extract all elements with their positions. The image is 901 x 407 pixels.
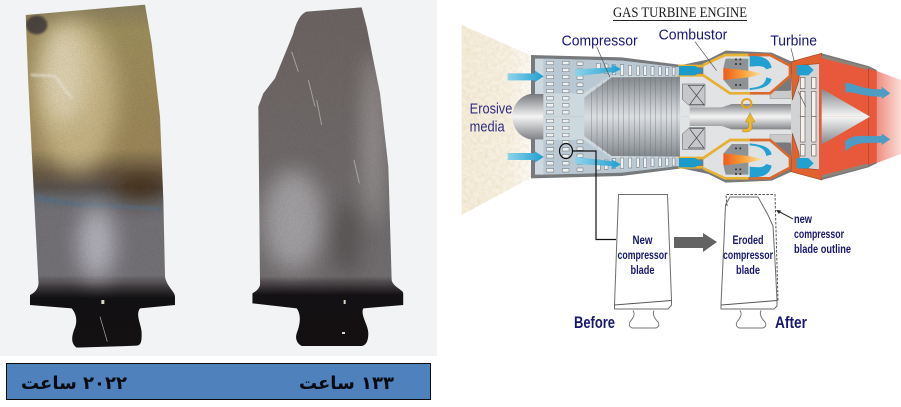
label: Erosive media: Erosive: [470, 102, 512, 118]
photo: blade after 133 hours: [250, 7, 407, 350]
new compressor blade: [614, 194, 672, 328]
label: Combustor: Combustor: [659, 27, 728, 43]
arrow: before to after: [674, 233, 717, 252]
label: new compressor blade outline: [794, 212, 851, 256]
exhaust flow arrows: [845, 83, 890, 99]
label: Eroded compressor blade: Eroded: [732, 233, 764, 247]
label: After: After: [775, 313, 807, 332]
engine labels: [470, 27, 817, 136]
label: new compressor blade outline: new: [794, 212, 813, 226]
blade root: [736, 310, 766, 328]
erosive media spray: [462, 25, 533, 215]
caption: 2022 hours: ۲۰۲۲ ساعت: [21, 373, 127, 394]
pointer: new blade outline: [776, 210, 793, 219]
label: New compressor blade: [618, 233, 668, 277]
photo: blade after 2022 hours: [23, 3, 177, 350]
photo panel: blade photographs: [0, 0, 437, 356]
label: Compressor: Compressor: [562, 33, 638, 49]
label: new compressor blade outline: compressor: [794, 227, 844, 241]
label: Eroded compressor blade: blade: [736, 263, 760, 277]
caption bar: hours of operation: [6, 364, 430, 400]
leader lines to labels: [597, 42, 806, 107]
title: GAS TURBINE ENGINE: [613, 5, 747, 21]
label: Turbine: Turbine: [770, 33, 817, 49]
label: new compressor blade outline: blade outline: [794, 242, 851, 256]
label: New compressor blade: blade: [630, 263, 655, 277]
eroded compressor blade: [721, 194, 778, 328]
label: Eroded compressor blade: compressor: [723, 248, 773, 262]
callout: circle and leader from compressor to blade: [560, 144, 616, 240]
label: New compressor blade: New: [632, 233, 653, 247]
label: Before: Before: [574, 313, 615, 332]
label: Erosive media: media: [470, 120, 505, 136]
engine body: [508, 51, 890, 183]
exhaust plume: [876, 71, 901, 163]
metal grain texture: [23, 3, 407, 283]
label: Eroded compressor blade: [723, 233, 773, 277]
label: Erosive media: [470, 102, 512, 136]
label: New compressor blade: compressor: [618, 248, 668, 262]
central shaft swirl arrows: [742, 99, 755, 132]
caption: 133 hours: ۱۳۳ ساعت: [299, 373, 394, 394]
nose cone: [512, 94, 543, 139]
diagram: gas turbine engine cross-section: [462, 25, 901, 215]
blade root: [629, 310, 659, 328]
